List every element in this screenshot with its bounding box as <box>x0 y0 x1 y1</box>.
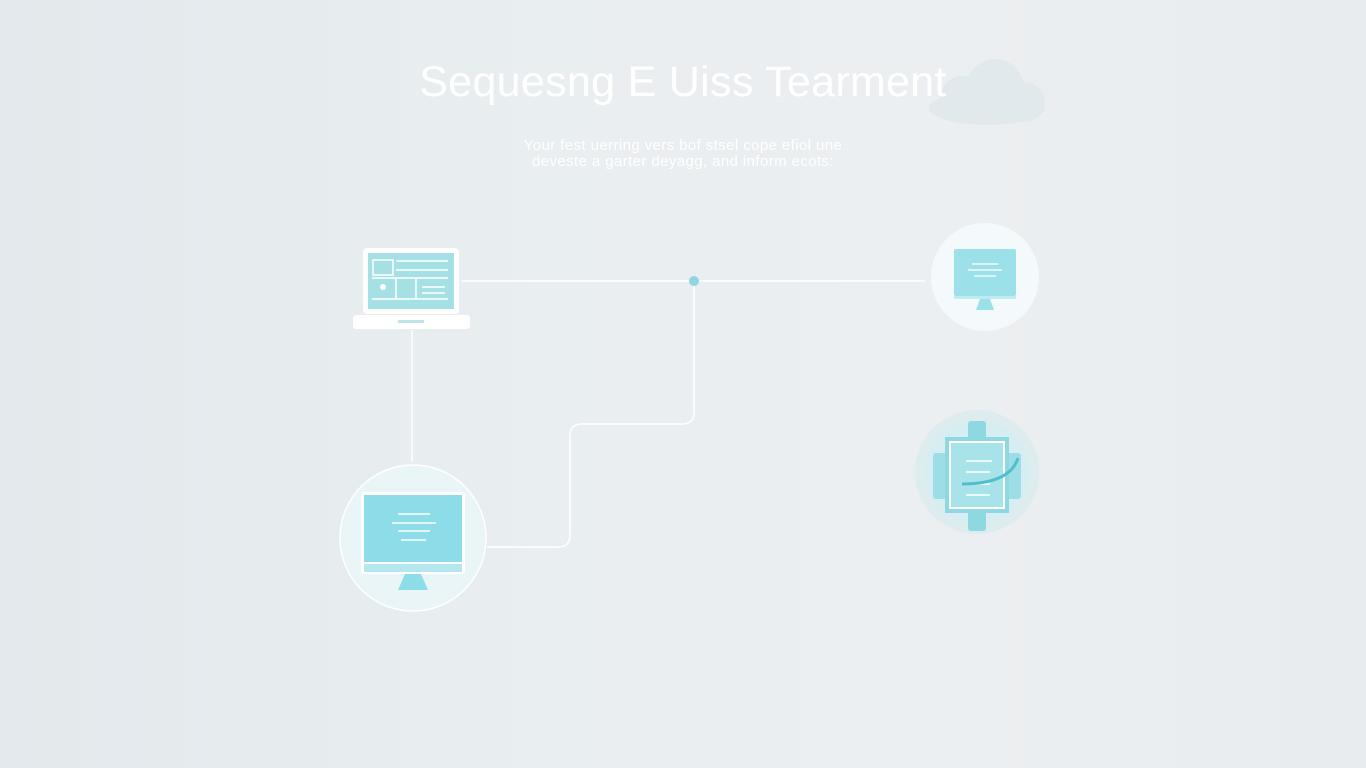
title: Sequesng E Uiss Tearment <box>419 58 947 106</box>
icon: cloud <box>929 59 1045 125</box>
icon: laptop <box>353 248 470 329</box>
icon: monitor circle small <box>931 223 1039 331</box>
subtitle: deveste a garter deyagg, and inform ecots: <box>532 153 834 170</box>
icon: monitor circle large <box>340 465 486 611</box>
connector dot <box>689 276 699 286</box>
connector lines <box>412 281 925 547</box>
subtitle <box>524 137 842 170</box>
icon: clipboard puzzle <box>915 410 1039 534</box>
subtitle: Your fest uerring vers bof stsel cope efiol une <box>524 137 842 154</box>
